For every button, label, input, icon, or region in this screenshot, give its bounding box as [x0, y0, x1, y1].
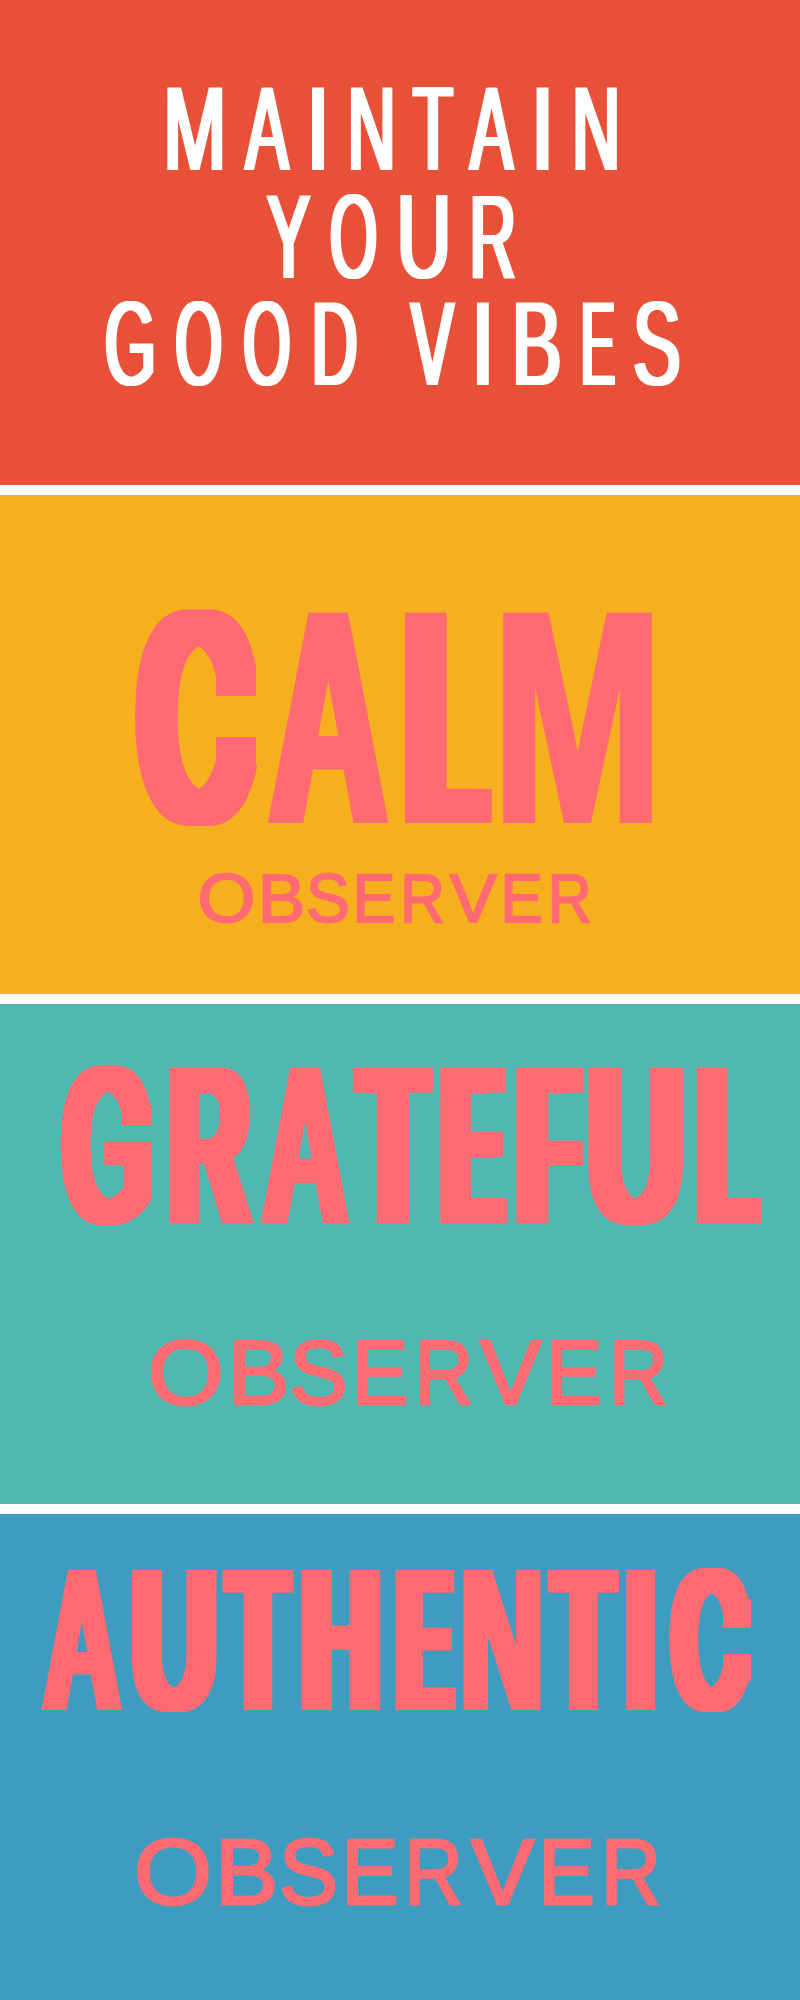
heading: AUTHENTIC: C	[672, 1527, 747, 1754]
label: OBSERVER: R	[548, 860, 592, 937]
label: OBSERVER: B	[228, 1322, 290, 1424]
heading line: GOOD VIBES: S	[633, 277, 680, 411]
label: OBSERVER: O	[148, 1322, 224, 1424]
panel: authentic	[0, 1514, 800, 2000]
heading line: MAINTAIN	[163, 62, 620, 196]
label: OBSERVER: B	[215, 1820, 278, 1924]
label: OBSERVER: R	[414, 1322, 473, 1424]
label: OBSERVER: V	[480, 1322, 541, 1424]
label: OBSERVER: V	[450, 860, 497, 937]
heading: AUTHENTIC: T	[554, 1527, 613, 1754]
label: OBSERVER: E	[501, 860, 543, 937]
heading line: GOOD VIBES: O	[175, 277, 222, 411]
heading line: GOOD VIBES: I	[472, 277, 494, 411]
heading: CALM: L	[409, 546, 483, 888]
heading: GRATEFUL: L	[700, 1018, 755, 1271]
heading: GRATEFUL: G	[62, 1018, 153, 1271]
panel: calm	[0, 495, 800, 994]
label: OBSERVER: S	[279, 1820, 338, 1924]
label: OBSERVER	[148, 1322, 668, 1424]
heading: CALM	[135, 546, 662, 888]
heading line: YOUR	[266, 170, 516, 304]
heading: AUTHENTIC: I	[621, 1527, 661, 1754]
heading line: YOUR: U	[397, 170, 451, 304]
heading: GRATEFUL: U	[587, 1018, 684, 1271]
heading line: YOUR: Y	[267, 170, 310, 304]
heading line: GOOD VIBES: E	[581, 277, 615, 411]
label: OBSERVER: E	[539, 1820, 595, 1924]
heading line: MAINTAIN: T	[413, 62, 453, 196]
heading: AUTHENTIC: A	[44, 1527, 120, 1754]
label: OBSERVER: R	[609, 1322, 668, 1424]
label: OBSERVER: E	[546, 1322, 602, 1424]
heading line: YOUR: R	[470, 170, 516, 304]
heading: CALM: C	[139, 546, 252, 888]
label: OBSERVER: E	[352, 1322, 408, 1424]
heading line: MAINTAIN: I	[307, 62, 329, 196]
heading: CALM: A	[270, 546, 387, 888]
heading line: MAINTAIN: M	[163, 62, 226, 196]
heading: AUTHENTIC: U	[131, 1527, 217, 1754]
heading: AUTHENTIC	[42, 1527, 751, 1754]
heading line: MAINTAIN: N	[348, 62, 396, 196]
heading line: MAINTAIN: N	[572, 62, 620, 196]
label: OBSERVER: B	[258, 860, 305, 937]
heading line: MAINTAIN: A	[246, 62, 288, 196]
heading: AUTHENTIC: H	[302, 1527, 380, 1754]
label: OBSERVER: O	[197, 860, 255, 937]
panel: title	[0, 0, 800, 485]
heading: GRATEFUL: A	[263, 1018, 348, 1271]
heading line: GOOD VIBES: D	[312, 277, 358, 411]
heading: CALM: M	[493, 546, 662, 888]
heading: GRATEFUL: E	[443, 1018, 502, 1271]
panel: grateful	[0, 1004, 800, 1504]
heading: GRATEFUL	[60, 1018, 762, 1271]
label: OBSERVER: S	[289, 1322, 348, 1424]
heading line: MAINTAIN: I	[532, 62, 554, 196]
label: OBSERVER	[197, 860, 592, 937]
heading line: GOOD VIBES	[105, 277, 680, 411]
heading: AUTHENTIC: T	[229, 1527, 287, 1754]
heading: GRATEFUL: F	[519, 1018, 578, 1271]
label: OBSERVER: V	[471, 1820, 534, 1924]
label: OBSERVER: R	[601, 1820, 661, 1924]
heading: AUTHENTIC: N	[461, 1527, 543, 1754]
heading line: GOOD VIBES: V	[411, 277, 454, 411]
heading line: GOOD VIBES: G	[105, 277, 156, 411]
heading line: YOUR: O	[330, 170, 377, 304]
label: OBSERVER: E	[342, 1820, 399, 1924]
label: OBSERVER: E	[352, 860, 395, 937]
heading line: GOOD VIBES: B	[512, 277, 562, 411]
heading: GRATEFUL: T	[360, 1018, 426, 1271]
heading line: MAINTAIN: A	[470, 62, 513, 196]
label: OBSERVER: R	[404, 1820, 463, 1924]
label: OBSERVER	[134, 1820, 661, 1924]
heading: AUTHENTIC: E	[398, 1527, 451, 1754]
label: OBSERVER: S	[306, 860, 350, 937]
label: OBSERVER: O	[134, 1820, 212, 1924]
heading: GRATEFUL: R	[169, 1018, 249, 1271]
label: OBSERVER: R	[400, 860, 445, 937]
heading line: GOOD VIBES: O	[243, 277, 290, 411]
